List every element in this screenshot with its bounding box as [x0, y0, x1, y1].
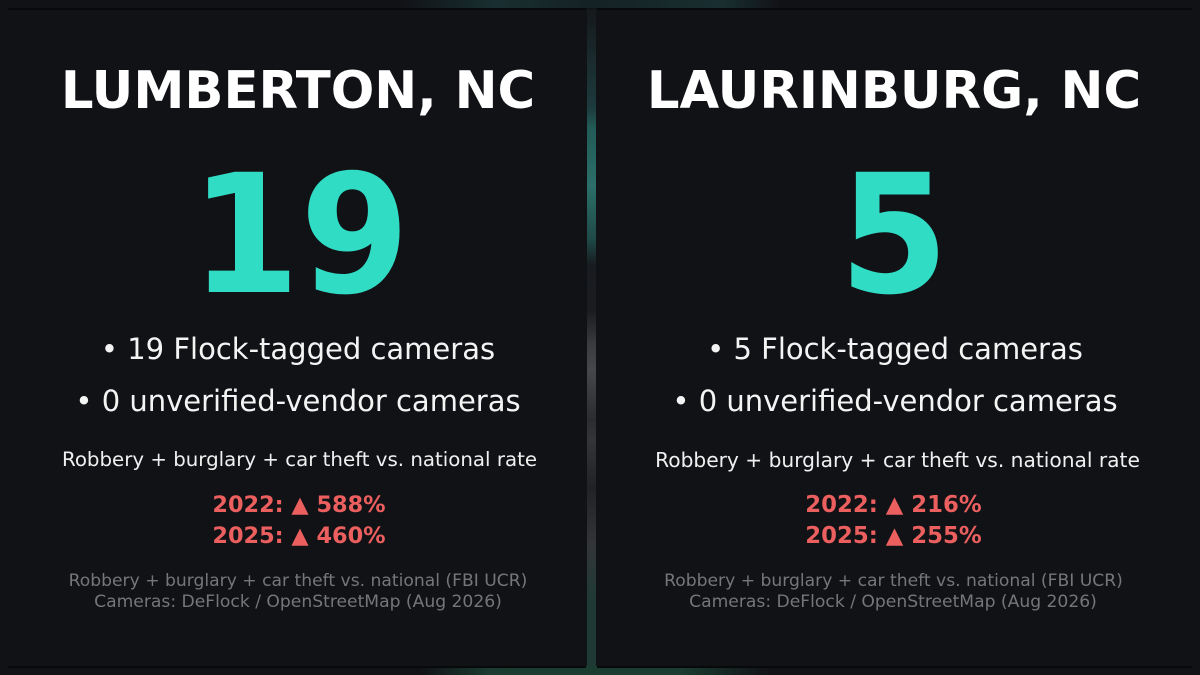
decorative bottom glow — [420, 666, 770, 675]
bullet: unverified cameras: • 0 unverified-vendor cameras — [672, 384, 1118, 418]
panel: Lumberton — [8, 8, 586, 668]
big number: 5: 5 — [839, 139, 948, 331]
bullet: Flock cameras: • 5 Flock-tagged cameras — [707, 332, 1083, 366]
source line 1: Robbery + burglary + car theft vs. national (FBI UCR) — [69, 571, 527, 591]
bullet: Flock cameras: • 19 Flock-tagged cameras — [101, 332, 495, 366]
source line 2: Cameras: DeFlock / OpenStreetMap (Aug 2026) — [689, 592, 1097, 612]
stat 2022: 2022: ▲ 588% — [212, 492, 386, 518]
subheading: Robbery + burglary + car theft vs. national rate — [655, 448, 1140, 472]
source line 1: Robbery + burglary + car theft vs. national (FBI UCR) — [664, 571, 1123, 591]
stat 2025: 2025: ▲ 460% — [212, 523, 386, 549]
big number: 19: 19 — [190, 139, 410, 331]
decorative top glow — [400, 0, 780, 8]
heading: Lumberton: LUMBERTON, NC — [61, 61, 535, 121]
source line 2: Cameras: DeFlock / OpenStreetMap (Aug 2026) — [94, 592, 502, 612]
stat 2025: 2025: ▲ 255% — [805, 523, 982, 549]
panel: Laurinburg — [597, 8, 1192, 668]
bullet: unverified cameras: • 0 unverified-vendor cameras — [75, 384, 521, 418]
subheading: Robbery + burglary + car theft vs. national rate — [62, 448, 537, 471]
stat 2022: 2022: ▲ 216% — [805, 492, 982, 518]
centre divider — [587, 9, 596, 666]
heading: Laurinburg: LAURINBURG, NC — [647, 61, 1141, 121]
